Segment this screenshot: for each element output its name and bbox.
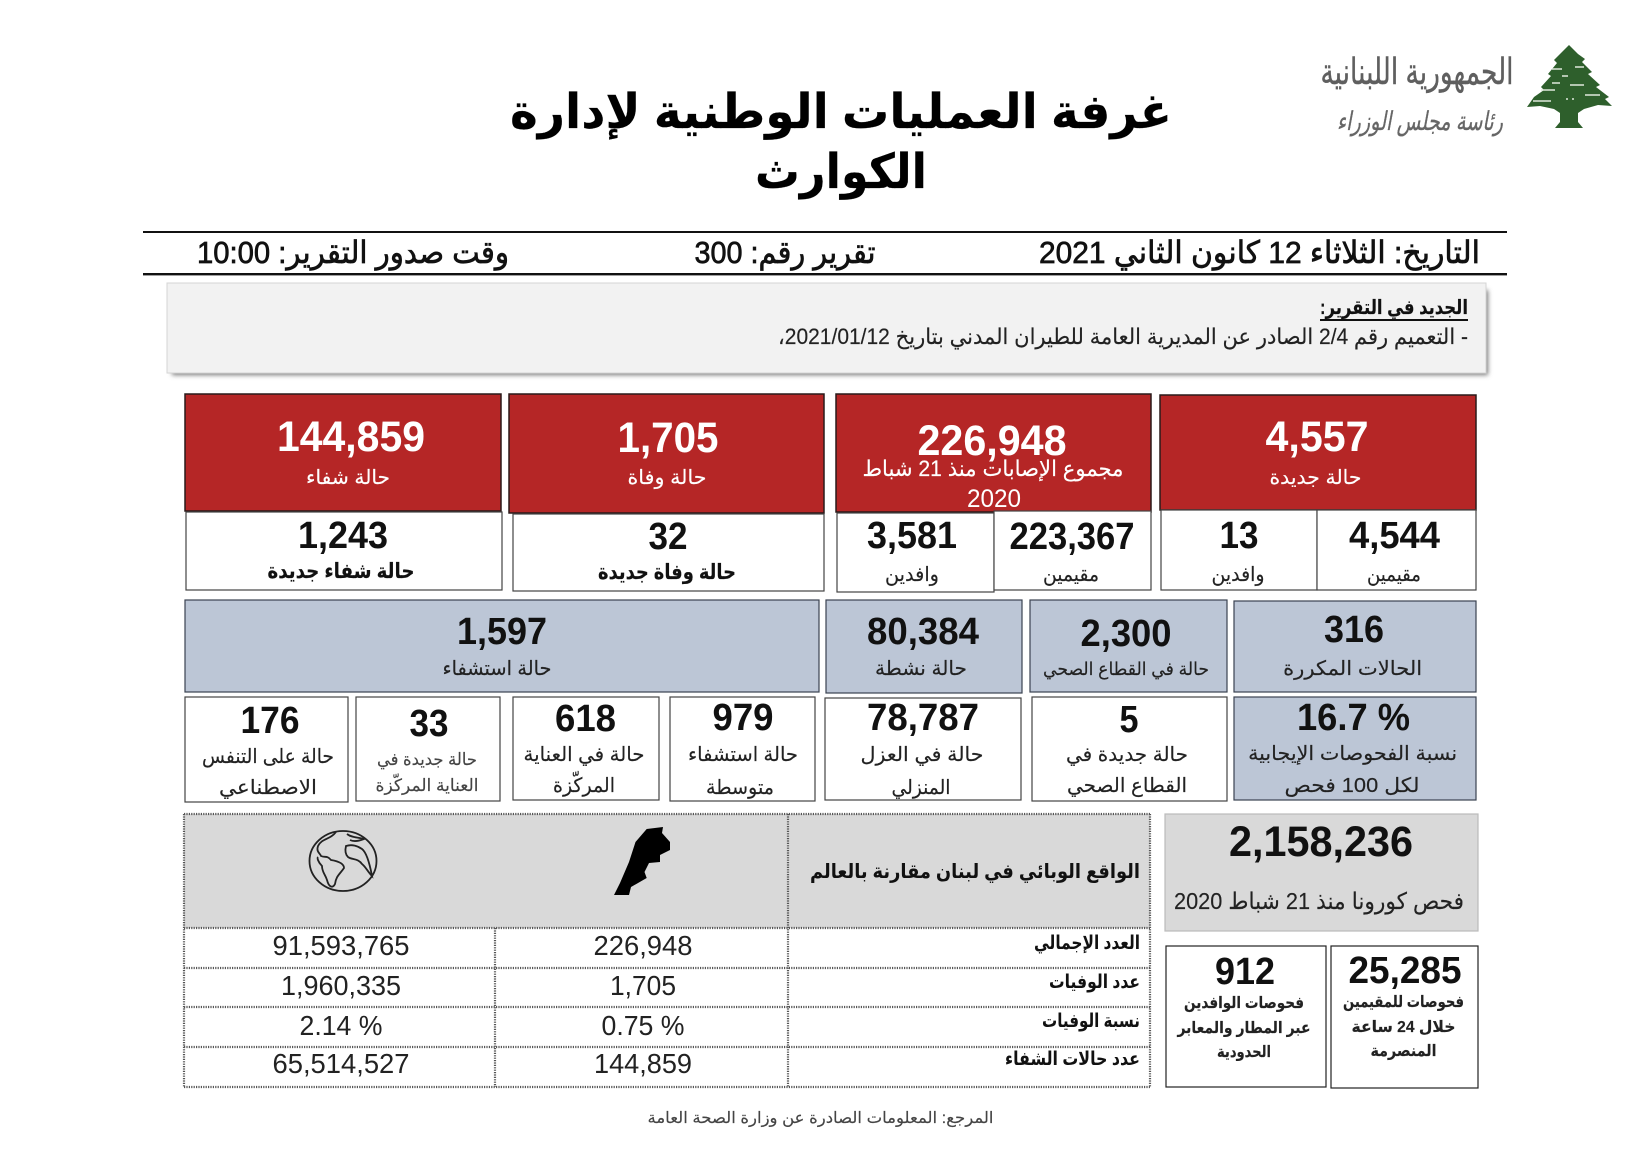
label: حالة في القطاع الصحي: [1043, 659, 1209, 680]
label: العناية المركّزة: [376, 773, 478, 795]
row: death rate: 2.14 %: [300, 1010, 382, 1041]
label: المنصرمة: [1370, 1043, 1436, 1060]
number: 1,597: [457, 611, 547, 653]
date: التاريخ: الثلاثاء 12 كانون الثاني 2021: [1039, 235, 1480, 271]
label: المركّزة: [553, 771, 615, 797]
label: نسبة الفحوصات الإيجابية: [1248, 743, 1457, 765]
panel: ICU: [513, 697, 659, 800]
panel: resident tests: [1331, 946, 1478, 1088]
panel: total cases: [836, 394, 1151, 513]
title: غرفة العمليات الوطنية لإدارة: [510, 86, 1172, 140]
label: حالة استشفاء: [442, 658, 552, 680]
row: recoveries: [272, 1048, 1140, 1079]
row: total: [272, 930, 1140, 961]
title: الكوارث: [755, 146, 927, 200]
panel: new residents: [1317, 510, 1476, 590]
label: [860, 744, 984, 800]
label: وافدين: [885, 564, 939, 586]
panel: home isolation: [825, 697, 1021, 800]
logo text: republic: الجمهورية اللبنانية: [1320, 51, 1514, 93]
table header: [184, 814, 1150, 928]
report meta strip: [143, 231, 1507, 275]
report number: تقرير رقم: 300: [694, 235, 876, 271]
label: خلال 24 ساعة: [1352, 1019, 1456, 1036]
row: recoveries: عدد حالات الشفاء: [1005, 1049, 1140, 1070]
label: الحالات المكررة: [1283, 658, 1422, 680]
row: death rate: [300, 1010, 1140, 1041]
row: recoveries: 144,859: [594, 1048, 692, 1079]
row: deaths: 1,960,335: [281, 970, 401, 1001]
row: total: 226,948: [594, 930, 692, 961]
panel: new deaths: [513, 514, 824, 591]
number: 16.7 %: [1297, 697, 1410, 739]
label: حالة على التنفس: [202, 746, 334, 768]
number: 2,300: [1080, 613, 1172, 655]
source footnote: المرجع: المعلومات الصادرة عن وزارة الصحة العامة: [648, 1110, 994, 1128]
label: مقيمين: [1367, 564, 1421, 586]
panel: moderate: [670, 697, 815, 801]
number: 223,367: [1010, 516, 1134, 558]
number: 1,243: [298, 515, 388, 557]
panel: deaths: [509, 394, 824, 513]
panel: total residents: [994, 511, 1151, 590]
label: [202, 746, 334, 800]
logo text: presidency of the council: رئاسة مجلس الوزراء: [1337, 106, 1503, 137]
icon: Lebanon map: [614, 827, 670, 895]
title: [510, 86, 1172, 200]
number: 80,384: [867, 611, 979, 653]
label: حالة استشفاء: [688, 744, 798, 766]
panel: repeated cases: [1234, 601, 1476, 692]
icon: globe: [310, 831, 376, 891]
note text: - التعميم رقم 2/4 الصادر عن المديرية العامة للطيران المدني بتاريخ 2021/01/12،: [778, 324, 1468, 350]
number: 144,859: [277, 413, 425, 461]
label: [1248, 743, 1457, 797]
label: [1066, 744, 1188, 798]
label: حالة في العزل: [860, 744, 984, 767]
panel: arrivals tests: [1166, 946, 1326, 1087]
label: [688, 744, 798, 799]
report time: وقت صدور التقرير: 10:00: [197, 235, 509, 271]
panel: new health sector: [1032, 697, 1227, 801]
row: deaths: 1,705: [610, 970, 676, 1001]
logo: Lebanese Republic cedar and calligraphy: [1320, 45, 1612, 137]
label: متوسطة: [706, 777, 774, 799]
label: مجموع الإصابات منذ 21 شباط: [862, 456, 1124, 481]
label: حالة نشطة: [875, 658, 967, 680]
label year: 2020: [967, 485, 1021, 513]
panel: hospitalized: [185, 600, 819, 692]
panel: active cases: [826, 600, 1022, 693]
label: فحص كورونا منذ 21 شباط 2020: [1174, 888, 1464, 915]
label: حالة وفاة: [628, 467, 706, 489]
label: [1343, 994, 1464, 1060]
label: فحوصات للمقيمين: [1343, 994, 1464, 1011]
row: total: 91,593,765: [272, 930, 410, 961]
panel: new cases: [1160, 395, 1476, 510]
icon: cedar tree: [1527, 45, 1612, 128]
table: Lebanon vs world: [184, 814, 1150, 1087]
label: [376, 750, 478, 795]
label: المنزلي: [892, 777, 950, 800]
panel: total arrivals: [837, 513, 994, 592]
panel: health sector cases: [1030, 600, 1227, 692]
panel: new arrivals: [1161, 510, 1317, 590]
label: [524, 744, 644, 797]
row: death rate: 0.75 %: [602, 1010, 684, 1041]
number: 316: [1324, 609, 1384, 651]
label: فحوصات الوافدين: [1184, 995, 1304, 1012]
number: 4,544: [1349, 515, 1440, 557]
label: حالة في العناية: [524, 744, 644, 767]
number: 618: [555, 698, 616, 740]
number: 226,948: [918, 417, 1066, 465]
row: total: العدد الإجمالي: [1034, 933, 1140, 954]
panel: total tests: [1165, 814, 1478, 931]
panel: new in report: [167, 283, 1488, 375]
number: 32: [648, 516, 688, 558]
label: حالة جديدة في: [1066, 744, 1188, 767]
number: 3,581: [867, 515, 957, 557]
label: وافدين: [1212, 564, 1264, 586]
table heading: الواقع الوبائي في لبنان مقارنة بالعالم: [810, 861, 1140, 884]
label: حالة شفاء جديدة: [268, 560, 414, 583]
label: حالة شفاء: [306, 467, 390, 489]
number: 912: [1215, 951, 1275, 993]
label: الاصطناعي: [219, 777, 317, 800]
panel: new recovered: [186, 512, 502, 590]
panel: recovered: [185, 394, 501, 511]
number: 78,787: [867, 697, 979, 739]
label: القطاع الصحي: [1067, 775, 1187, 798]
number: 2,158,236: [1229, 818, 1413, 866]
number: 25,285: [1348, 950, 1462, 992]
label: الحدودية: [1217, 1044, 1271, 1061]
number: 13: [1220, 515, 1258, 557]
panel: new ICU: [356, 697, 500, 801]
number: 979: [712, 697, 774, 739]
note heading: الجديد في التقرير:: [1320, 297, 1468, 320]
label: عبر المطار والمعابر: [1177, 1020, 1310, 1037]
label: لكل 100 فحص: [1284, 775, 1420, 797]
panel: ventilated: [185, 697, 348, 802]
label: [1177, 995, 1310, 1061]
label: حالة جديدة: [1270, 467, 1362, 489]
number: 33: [410, 703, 448, 745]
row: deaths: [281, 970, 1140, 1001]
number: 1,705: [618, 414, 718, 462]
panel: positivity rate: [1234, 697, 1476, 800]
label: حالة وفاة جديدة: [598, 561, 736, 584]
row: death rate: نسبة الوفيات: [1042, 1011, 1140, 1032]
number: 5: [1120, 699, 1138, 741]
number: 176: [240, 700, 300, 742]
row: recoveries: 65,514,527: [272, 1048, 410, 1079]
row: deaths: عدد الوفيات: [1049, 972, 1140, 993]
number: 4,557: [1266, 413, 1368, 461]
label: مقيمين: [1043, 564, 1099, 586]
label: حالة جديدة في: [377, 750, 477, 770]
